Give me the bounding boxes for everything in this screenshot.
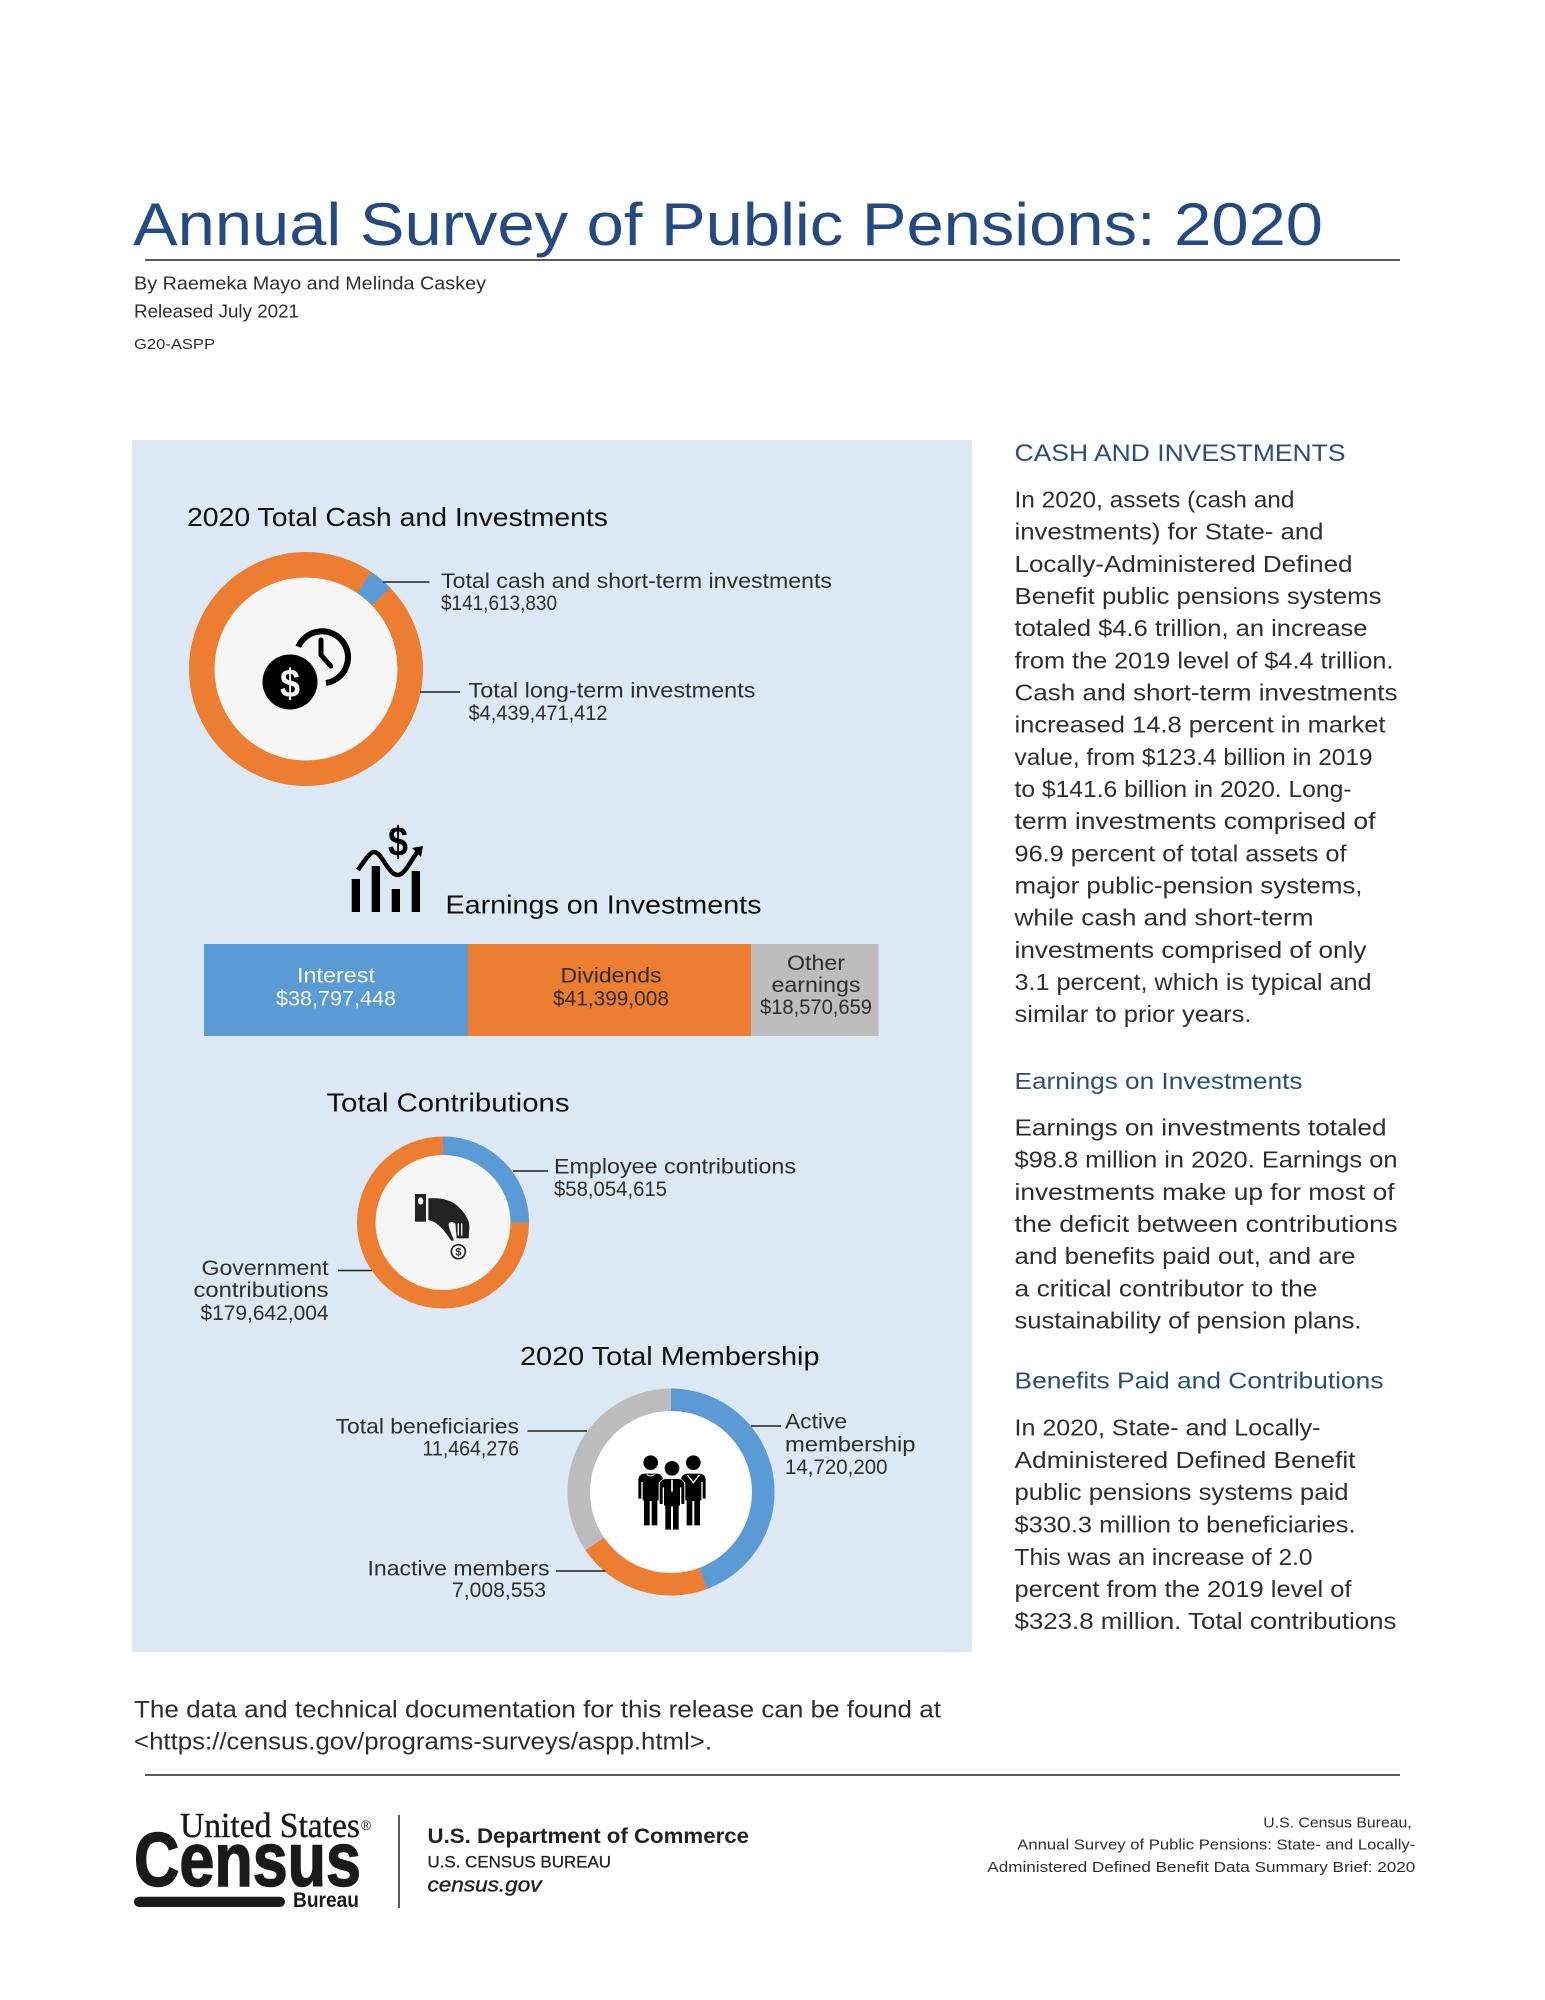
byline block: G20-ASPP	[134, 336, 215, 353]
callout: active membership: Active	[785, 1410, 847, 1434]
stacked bar: earnings on investments	[204, 944, 878, 1036]
department block: census.gov	[428, 1874, 543, 1896]
callout: inactive members: 7,008,553	[452, 1579, 546, 1602]
census logo: ®	[361, 1817, 372, 1833]
icon: earnings chart: $	[388, 818, 408, 865]
text block: benefits: $330.3 million to beneficiaries.	[1014, 1512, 1356, 1538]
bar label: interest: $38,797,448	[276, 988, 396, 1011]
text block: cash and investments: Locally-Administered Defined	[1014, 551, 1352, 577]
bar label: dividends: $41,399,008	[553, 988, 669, 1011]
icon: hand dropping coin: $	[455, 1247, 461, 1259]
heading: earnings on investments: Earnings on Investments	[446, 890, 762, 920]
callout: long-term investments	[420, 680, 756, 725]
source citation	[987, 1814, 1415, 1876]
text block: cash and investments: Benefit public pensions systems	[1014, 583, 1382, 609]
text block: earnings: and benefits paid out, and are	[1014, 1243, 1356, 1269]
callout: government contributions: $179,642,004	[200, 1302, 329, 1325]
data note: The data and technical documentation for this release can be found at	[134, 1696, 941, 1724]
text block: cash and investments: 96.9 percent of total assets of	[1014, 840, 1347, 866]
icon: coin and clock	[262, 631, 348, 710]
source citation: Administered Defined Benefit Data Summary Brief: 2020	[987, 1859, 1415, 1876]
text block: cash and investments: 3.1 percent, which is typical and	[1014, 969, 1372, 995]
callout: employee contributions: Employee contributions	[554, 1156, 796, 1178]
text block: cash and investments: In 2020, assets (cash and	[1014, 486, 1294, 512]
source citation: U.S. Census Bureau,	[1263, 1814, 1412, 1831]
department block: U.S. Department of Commerce	[428, 1825, 749, 1848]
text block: benefits: percent from the 2019 level of	[1014, 1576, 1352, 1602]
callout: long-term investments: Total long-term investments	[468, 680, 756, 702]
donut chart: cash and investments	[189, 552, 423, 786]
callout: government contributions	[194, 1257, 372, 1325]
bar label: interest	[276, 965, 396, 1011]
callout: government contributions: contributions	[194, 1279, 328, 1302]
callout: cash and short-term investments	[383, 570, 832, 615]
heading: earnings on investments: Earnings on Investments	[1014, 1068, 1302, 1094]
text block: cash and investments: major public-pension systems,	[1014, 872, 1362, 898]
text block: cash and investments: totaled $4.6 trillion, an increase	[1014, 615, 1368, 641]
callout: cash and short-term investments: Total cash and short-term investments	[441, 570, 832, 593]
callout: total beneficiaries: Total beneficiaries	[336, 1416, 519, 1438]
heading: 2020 total membership: 2020 Total Membership	[520, 1341, 820, 1371]
callout: active membership: membership	[785, 1434, 916, 1456]
source citation: Annual Survey of Public Pensions: State- and Locally-	[1017, 1836, 1415, 1853]
bar label: other earnings	[760, 952, 872, 1019]
text block: earnings: a critical contributor to the	[1014, 1275, 1318, 1301]
callout: employee contributions	[513, 1156, 796, 1201]
callout: inactive members	[368, 1558, 606, 1602]
text block: earnings: Earnings on investments totaled	[1014, 1114, 1386, 1140]
text block: cash and investments: increased 14.8 percent in market	[1014, 712, 1386, 738]
text block: benefits: public pensions systems paid	[1014, 1479, 1348, 1505]
text block: earnings: $98.8 million in 2020. Earnings on	[1014, 1147, 1398, 1173]
census logo: Bureau	[293, 1889, 359, 1912]
text block: cash and investments: similar to prior years.	[1014, 1001, 1252, 1027]
text block: cash and investments	[1013, 486, 1398, 1027]
text block: cash and investments: investments) for State- and	[1014, 519, 1324, 545]
donut chart: contributions	[357, 1136, 529, 1308]
callout: government contributions: Government	[202, 1257, 329, 1280]
heading: benefits paid and contributions: Benefits Paid and Contributions	[1014, 1368, 1384, 1394]
census logo: United States	[180, 1806, 360, 1845]
text block: earnings: investments make up for most of	[1014, 1179, 1395, 1205]
data note: <https://census.gov/programs-surveys/aspp.html>.	[134, 1728, 712, 1756]
icon: coin and clock: $	[280, 662, 300, 706]
byline block	[134, 274, 486, 353]
data note	[134, 1696, 941, 1756]
text block: earnings	[1014, 1114, 1398, 1334]
callout: active membership	[751, 1410, 916, 1479]
callout: cash and short-term investments: $141,613,830	[441, 592, 557, 615]
text block: benefits: Administered Defined Benefit	[1014, 1447, 1356, 1473]
text block: earnings: sustainability of pension plans.	[1014, 1308, 1362, 1334]
text block: cash and investments: investments comprised of only	[1014, 937, 1367, 963]
census logo: Census	[134, 1818, 361, 1903]
bar label: dividends	[553, 965, 669, 1011]
callout: long-term investments: $4,439,471,412	[468, 702, 608, 725]
text block: cash and investments: value, from $123.4 billion in 2019	[1014, 744, 1372, 770]
callout: employee contributions: $58,054,615	[554, 1178, 667, 1201]
icon: hand dropping coin	[415, 1194, 469, 1259]
text block: cash and investments: to $141.6 billion in 2020. Long-	[1014, 776, 1352, 802]
bar label: other earnings: Other	[787, 952, 845, 975]
bar label: other earnings: earnings	[772, 974, 860, 997]
text block: cash and investments: term investments comprised of	[1014, 808, 1376, 834]
text block: benefits: This was an increase of 2.0	[1014, 1544, 1312, 1570]
title: Annual Survey of Public Pensions: 2020	[133, 191, 1323, 258]
heading: 2020 total cash and investments: 2020 Total Cash and Investments	[187, 502, 608, 532]
byline block: Released July 2021	[134, 302, 299, 322]
department block	[428, 1825, 749, 1896]
text block: cash and investments: from the 2019 level of $4.4 trillion.	[1014, 647, 1394, 673]
text block: cash and investments: while cash and short-term	[1013, 905, 1314, 931]
donut chart: membership	[568, 1388, 774, 1596]
text block: benefits: In 2020, State- and Locally-	[1014, 1415, 1320, 1441]
text block: earnings: the deficit between contributions	[1014, 1211, 1398, 1237]
text block: cash and investments: Cash and short-term investments	[1014, 680, 1398, 706]
text block: benefits: $323.8 million. Total contributions	[1014, 1608, 1396, 1634]
callout: total beneficiaries	[336, 1416, 587, 1460]
bar label: other earnings: $18,570,659	[760, 996, 872, 1019]
heading: total contributions: Total Contributions	[326, 1088, 570, 1118]
department block: U.S. CENSUS BUREAU	[428, 1852, 611, 1872]
heading: cash and investments: CASH AND INVESTMENTS	[1014, 440, 1346, 467]
icon: three people	[638, 1455, 706, 1530]
icon: earnings chart	[352, 818, 423, 912]
callout: inactive members: Inactive members	[368, 1558, 550, 1580]
callout: total beneficiaries: 11,464,276	[422, 1438, 519, 1460]
bar label: dividends: Dividends	[560, 965, 662, 988]
bar label: interest: Interest	[297, 965, 375, 988]
callout: active membership: 14,720,200	[785, 1456, 888, 1479]
text block: benefits	[1014, 1415, 1396, 1634]
panel: infographic	[132, 440, 972, 1652]
byline block: By Raemeka Mayo and Melinda Caskey	[134, 274, 486, 294]
